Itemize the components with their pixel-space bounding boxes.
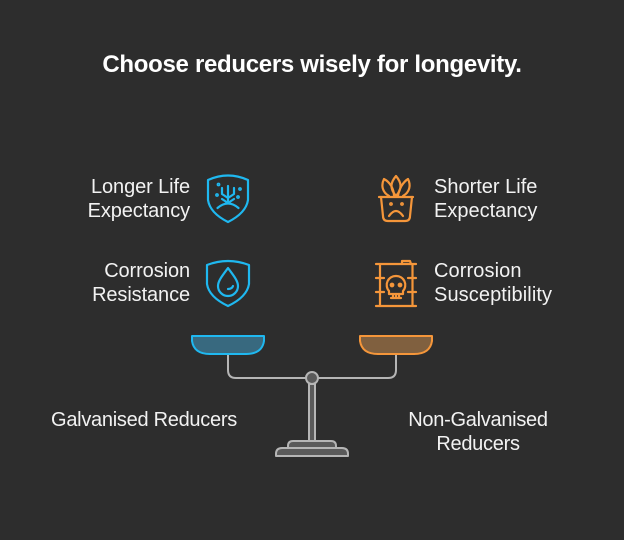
label: non-galvanised reducers: Non-Galvanised bbox=[408, 409, 548, 431]
scale stand bbox=[276, 372, 348, 456]
label: shorter life expectancy bbox=[434, 176, 538, 222]
label: corrosion susceptibility: Susceptibility bbox=[434, 284, 552, 306]
scale pan: right bbox=[360, 336, 432, 354]
title: Choose reducers wisely for longevity. bbox=[102, 51, 522, 78]
label: longer life expectancy: Longer Life bbox=[91, 176, 190, 198]
label: longer life expectancy bbox=[88, 176, 190, 222]
label: corrosion resistance bbox=[92, 260, 190, 306]
scale pan: left bbox=[192, 336, 264, 354]
label: shorter life expectancy: Shorter Life bbox=[434, 176, 537, 198]
label: galvanised reducers: Galvanised Reducers bbox=[51, 409, 237, 431]
label: corrosion susceptibility: Corrosion bbox=[434, 260, 522, 282]
label: shorter life expectancy: Expectancy bbox=[434, 200, 537, 222]
scale arm and hangers bbox=[228, 354, 396, 378]
label: corrosion resistance: Resistance bbox=[92, 284, 190, 306]
icon: shield with water drop bbox=[207, 261, 249, 306]
icon: shield with branching coral bbox=[208, 176, 248, 222]
label: corrosion susceptibility bbox=[434, 260, 552, 306]
label: longer life expectancy: Expectancy bbox=[88, 200, 190, 222]
label: non-galvanised reducers: Reducers bbox=[436, 433, 520, 455]
icon: plant pot with sad face bbox=[379, 176, 413, 221]
label: non-galvanised reducers bbox=[408, 409, 548, 455]
icon: barrel with skull bbox=[376, 261, 416, 306]
label: corrosion resistance: Corrosion bbox=[104, 260, 190, 282]
